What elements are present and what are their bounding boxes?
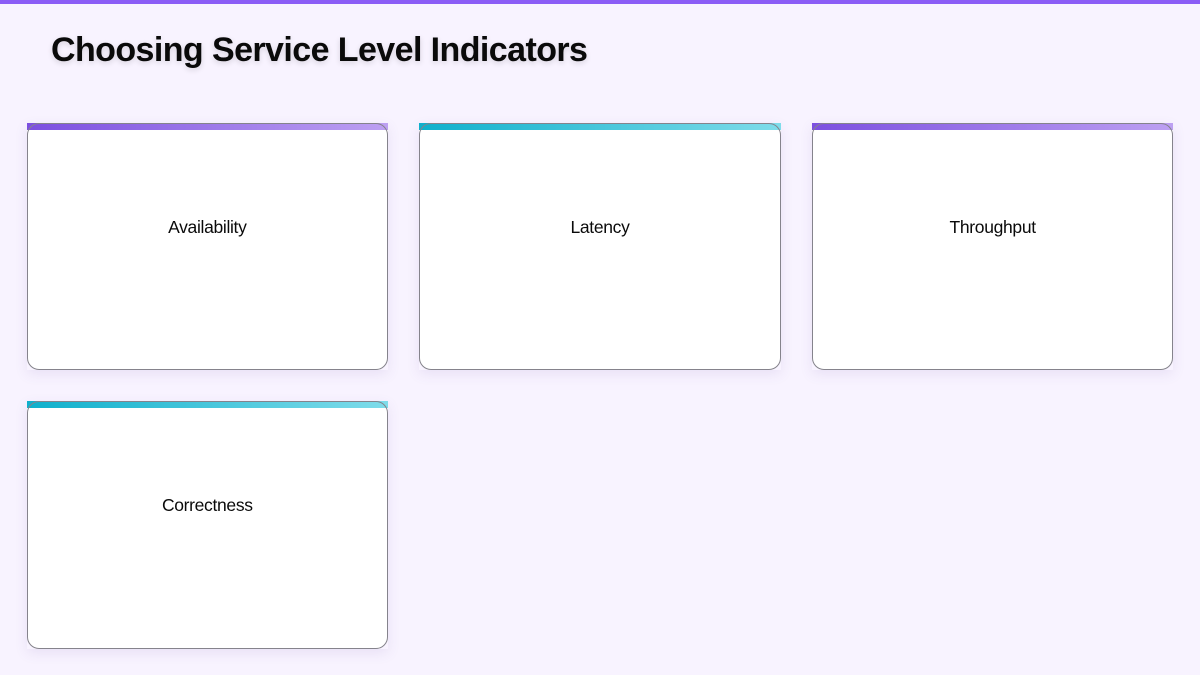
label: throughput: Throughput	[950, 217, 1036, 237]
label: availability: Availability	[168, 217, 247, 237]
title: Choosing Service Level Indicators	[51, 31, 587, 69]
card outline	[27, 123, 388, 370]
card body	[27, 407, 388, 649]
card outline	[419, 123, 781, 370]
accent strip: cyan	[27, 401, 388, 408]
card outline	[27, 401, 388, 649]
card body	[27, 129, 388, 370]
card body	[812, 129, 1173, 370]
panel: correctness	[27, 401, 388, 649]
label: latency: Latency	[570, 217, 629, 237]
accent strip: purple	[812, 123, 1173, 130]
card body	[419, 129, 781, 370]
accent strip: cyan	[419, 123, 781, 130]
label: correctness: Correctness	[162, 495, 253, 515]
accent strip: purple	[27, 123, 388, 130]
panel: availability	[27, 123, 388, 370]
card outline	[812, 123, 1173, 370]
top accent bar	[0, 0, 1200, 4]
panel: throughput	[812, 123, 1173, 370]
panel: latency	[419, 123, 781, 370]
